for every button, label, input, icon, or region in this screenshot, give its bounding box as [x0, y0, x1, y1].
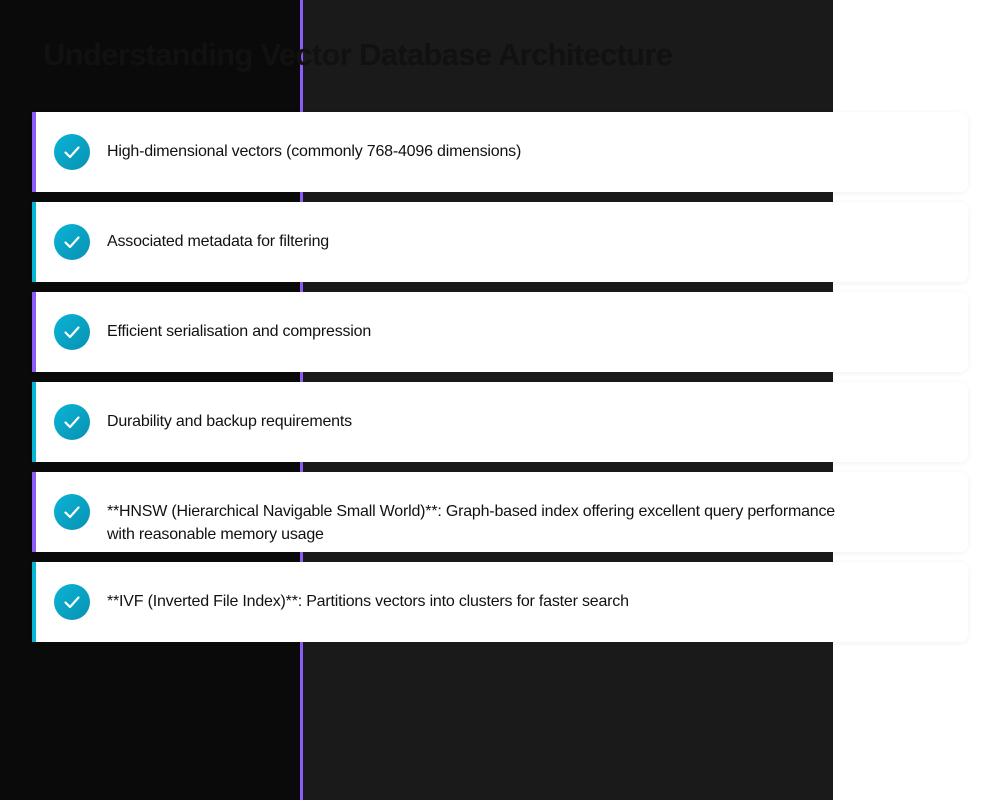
icon: check	[54, 404, 90, 440]
text: **IVF (Inverted File Index)**: Partitions vectors into clusters for faster search	[107, 593, 629, 610]
text: **HNSW (Hierarchical Navigable Small World)**: Graph-based index offering excellent query performance with reasonable memory usage	[107, 503, 835, 543]
icon: check	[54, 494, 90, 530]
card 2	[32, 202, 968, 282]
card 1	[32, 112, 968, 192]
icon: check	[54, 224, 90, 260]
card 6	[32, 562, 968, 642]
icon: check	[54, 314, 90, 350]
icon: check	[54, 584, 90, 620]
text: Associated metadata for filtering	[107, 233, 329, 250]
card 5	[32, 472, 968, 552]
text: Durability and backup requirements	[107, 413, 352, 430]
text: High-dimensional vectors (commonly 768-4096 dimensions)	[107, 143, 521, 160]
title: Understanding Vector Database Architecture	[43, 37, 672, 72]
text: Efficient serialisation and compression	[107, 323, 371, 340]
card 3	[32, 292, 968, 372]
card 4	[32, 382, 968, 462]
icon: check	[54, 134, 90, 170]
